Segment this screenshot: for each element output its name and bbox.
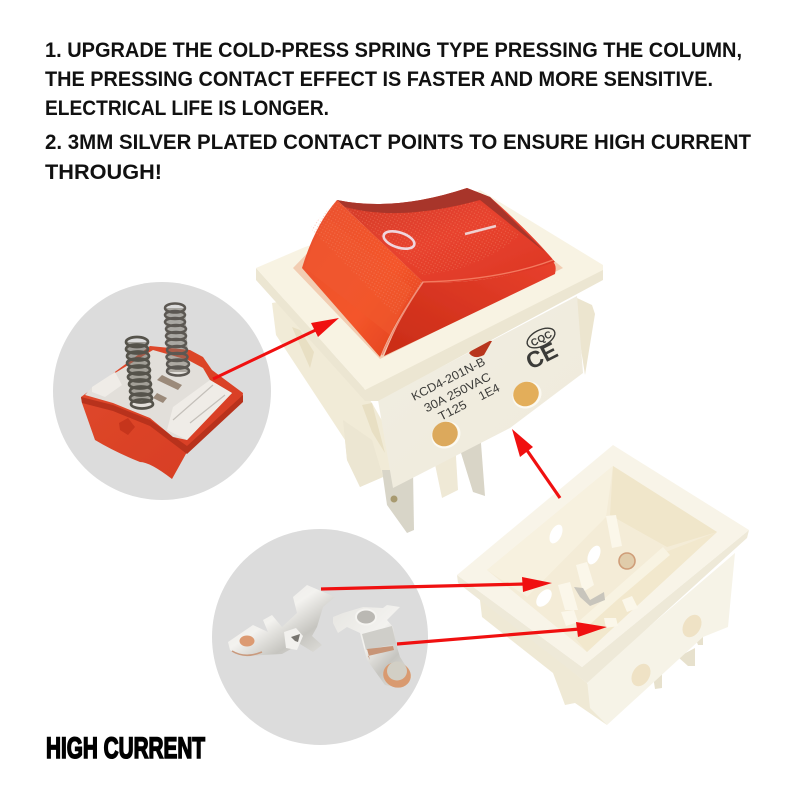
housing through holes [547, 523, 565, 545]
heading text block: THE PRESSING CONTACT EFFECT IS FASTER AND MORE SENSITIVE. [45, 67, 713, 91]
off symbol [381, 228, 417, 252]
rim front band [457, 530, 749, 683]
rocker dark edge [337, 188, 545, 252]
far inner wall [610, 466, 717, 547]
rocker left face dots [310, 200, 423, 315]
left ribbed clip shade [292, 327, 385, 453]
panel: spring detail circle [53, 282, 271, 500]
on symbol [465, 226, 496, 234]
silver contact right [333, 605, 414, 692]
CQC mark: CQC [529, 329, 554, 349]
printed model text: 30A 250VAC [422, 369, 493, 415]
copper patch [367, 646, 394, 660]
rocker highlight edge [423, 260, 553, 282]
centre divider [578, 547, 670, 627]
contact right shaded bend [362, 626, 396, 650]
side right clip [577, 298, 595, 375]
heading text block: 1. UPGRADE THE COLD-PRESS SPRING TYPE PRESSING THE COLUMN, [45, 38, 742, 62]
middle block [432, 440, 458, 498]
inner posts [558, 515, 638, 628]
high current label: HIGH CURRENT [46, 732, 205, 765]
silver contact inside [574, 587, 605, 606]
rocker left face [302, 200, 423, 357]
panel: contact points detail circle [212, 529, 428, 745]
opening floor [487, 466, 717, 652]
rocker top dots [345, 194, 520, 275]
silver contact left [228, 585, 335, 657]
lamp slot [469, 341, 492, 357]
terminal holes [427, 416, 465, 454]
printed model text [409, 354, 502, 430]
insert corner pad [92, 372, 122, 397]
CE mark: CE [521, 337, 562, 374]
contact left lower shadow [232, 651, 262, 655]
switch left side wall [272, 300, 410, 487]
housing pins [653, 632, 703, 689]
insert slots [153, 375, 182, 403]
heading text block [45, 38, 751, 184]
printed model text: KCD4-201N-B [409, 354, 488, 404]
arrow: upper contact to base [321, 577, 552, 592]
terminal right [457, 430, 485, 496]
housing holes [628, 660, 654, 690]
housing right wall [587, 553, 735, 725]
shell tab [119, 418, 135, 435]
arrow: rocker spring to rocker [213, 318, 339, 379]
rocker front face [384, 262, 556, 356]
base housing [457, 445, 749, 725]
heading text block: ELECTRICAL LIFE IS LONGER. [45, 96, 329, 120]
copper rivet large [380, 658, 414, 692]
frame top surface [256, 190, 603, 390]
frame front band [256, 268, 603, 401]
copper rivet small [240, 636, 254, 646]
main switch [256, 188, 603, 533]
white insert [85, 350, 232, 440]
screw hole right [356, 610, 376, 624]
screw dome left [284, 628, 303, 650]
housing left skirt [470, 590, 607, 725]
screw hole left [291, 634, 300, 642]
rocker face highlight [305, 218, 412, 335]
shell dark lip [81, 395, 243, 454]
rear pillar [343, 420, 383, 487]
rocker underside red shell [81, 346, 243, 479]
printed model text: T125 [436, 397, 469, 424]
arrow: base to switch body [512, 429, 560, 498]
printed model text: 1E4 [476, 381, 502, 403]
rim top [457, 445, 749, 667]
CQC mark [524, 324, 558, 352]
insert groove [173, 385, 225, 423]
cavity shadow [293, 192, 563, 359]
front body [378, 296, 583, 488]
heading text block: 2. 3MM SILVER PLATED CONTACT POINTS TO ENSURE HIGH CURRENT [45, 130, 751, 154]
coil spring left [126, 337, 153, 408]
terminal left [382, 470, 414, 533]
copper contact inside [619, 553, 635, 569]
lower channel [575, 532, 717, 652]
arrow: lower contact to base [397, 622, 607, 644]
rocker corner highlight [382, 282, 423, 355]
heading text block: THROUGH! [45, 160, 162, 184]
near inner wall [487, 466, 613, 597]
coil spring right [165, 304, 189, 376]
insert raised block [167, 380, 232, 440]
rocker top face [337, 188, 555, 282]
